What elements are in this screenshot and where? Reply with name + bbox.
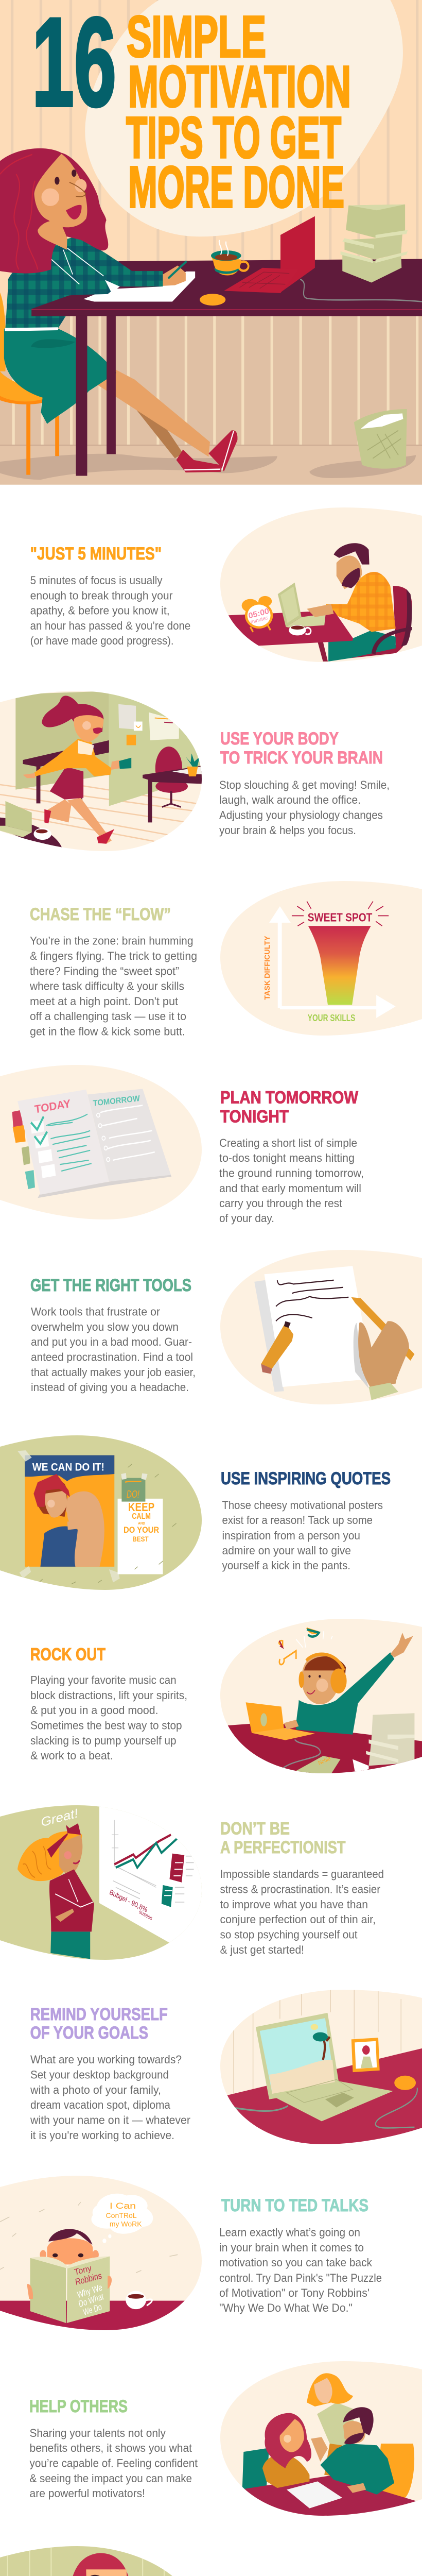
body text: to improve what you have than — [220, 1898, 368, 1911]
body text — [220, 1868, 384, 1956]
body text: yourself a kick in the pants. — [222, 1559, 350, 1572]
body text: apathy, & before you know it, — [30, 604, 170, 617]
body text: Creating a short list of simple — [219, 1137, 357, 1149]
heading: ROCK OUT — [30, 1645, 106, 1665]
body text: of your day. — [219, 1212, 274, 1225]
body text: off a challenging task — use it to — [30, 1010, 186, 1023]
body text: & put you in a good mood. — [30, 1704, 159, 1717]
chart: sweet spot funnel, task difficulty vs your skills — [220, 881, 422, 1036]
body text: Those cheesy motivational posters — [222, 1499, 383, 1512]
body text: exist for a reason! Tack up some — [222, 1514, 373, 1527]
illustration: laptop with beach wallpaper and family photo — [220, 1989, 422, 2150]
body text: with your name on it — whatever — [30, 2113, 190, 2127]
illustration: person reading Tony Robbins book: ConTRoL — [106, 2211, 137, 2219]
body text: get in the flow & kick some butt. — [30, 1025, 185, 1038]
panel: tip turn to ted talks — [0, 2176, 382, 2337]
body text: Adjusting your physiology changes — [219, 809, 383, 821]
panel: tip plan tomorrow tonight — [0, 1065, 364, 1225]
body text: benefits others, it shows you what — [30, 2442, 192, 2454]
body text — [219, 778, 390, 837]
body text: stress & procrastination. It’s easier — [220, 1883, 380, 1896]
body text: overwhelm you slow you down — [31, 1320, 179, 1333]
hero scene: office background and woman at desk — [0, 0, 422, 485]
heading: TURN TO TED TALKS — [221, 2196, 368, 2215]
illustration: person reading Tony Robbins book: Do What — [78, 2292, 105, 2310]
body text: conjure perfection out of thin air, — [220, 1913, 376, 1926]
body text — [219, 2226, 382, 2314]
illustration: man with headphones rocking out at laptop — [220, 1619, 422, 1775]
body text: and put you in a bad mood. Guar- — [31, 1335, 192, 1348]
illustration: open planner with today and tomorrow pages: TODAY — [34, 1097, 72, 1116]
body text: in your brain when it comes to — [219, 2241, 364, 2254]
body text: (or have made good progress). — [30, 634, 174, 647]
chart: sweet spot funnel, task difficulty vs your skills: TASK DIFFICULTY — [263, 936, 272, 1000]
title — [126, 4, 351, 219]
body text — [30, 2427, 198, 2500]
illustration: woman presenting chart on whiteboard: Bubgel - 90,8% — [109, 1888, 149, 1914]
heading — [220, 1088, 359, 1127]
body text — [30, 2053, 190, 2142]
body text: motivation so you can take back — [219, 2256, 373, 2269]
heading: REMIND YOURSELF — [30, 2005, 168, 2024]
illustration: person reading Tony Robbins book: Why We — [76, 2282, 103, 2300]
heading: TONIGHT — [220, 1107, 289, 1127]
chart: sweet spot funnel, task difficulty vs your skills: SWEET SPOT — [308, 911, 372, 924]
body text: an hour has passed & you’re done — [30, 619, 190, 632]
title: SIMPLE — [127, 4, 266, 69]
illustration: we can do it and keep calm posters — [0, 1435, 202, 1590]
illustration: we can do it and keep calm posters: BEST — [132, 1535, 149, 1543]
heading — [30, 2005, 168, 2043]
body text — [219, 1137, 364, 1225]
illustration: woman presenting chart on whiteboard: Great! — [40, 1806, 79, 1829]
illustration: hand writing with a broken pencil — [220, 1250, 422, 1404]
heading — [220, 729, 383, 768]
body text — [31, 1306, 196, 1394]
body text: laugh, walk around the office. — [219, 793, 361, 806]
illustration: dancing woman in office — [0, 691, 207, 851]
body text — [29, 935, 197, 1038]
body text: & fingers flying. The trick to getting — [30, 950, 197, 962]
body text: Impossible standards = guaranteed — [220, 1868, 384, 1880]
heading: DON’T BE — [220, 1819, 290, 1839]
illustration: person reading Tony Robbins book: I Can — [110, 2201, 136, 2211]
body text: are powerful motivators! — [30, 2487, 145, 2500]
heading: PLAN TOMORROW — [220, 1088, 359, 1108]
body text: and that early momentum will — [219, 1182, 361, 1195]
illustration: three coworkers talking at table — [220, 2361, 422, 2521]
body text: of Motivation" or Tony Robbins' — [219, 2286, 370, 2299]
body text: inspiration from a person you — [222, 1529, 360, 1542]
illustration: we can do it and keep calm posters: AND — [138, 1522, 145, 1526]
body text: enough to break through your — [30, 589, 173, 602]
panel: hero illustration — [0, 0, 422, 485]
illustration: person reading Tony Robbins book: Robbins — [75, 2270, 102, 2287]
body text: you’re capable of. Feeling confident — [30, 2456, 198, 2470]
body text: there? Finding the “sweet spot” — [30, 964, 179, 978]
illustration: person reading Tony Robbins book: Tony — [74, 2263, 93, 2277]
heading — [220, 1819, 346, 1857]
illustration: woman presenting chart on whiteboard: susess — [138, 1909, 153, 1922]
body text: so stop psyching yourself out — [220, 1928, 357, 1941]
panel: tip remind yourself of your goals — [30, 1989, 422, 2150]
body text: that actually makes your job easier, — [31, 1366, 196, 1379]
illustration: open planner with today and tomorrow pages — [0, 1065, 202, 1219]
panel: tip use inspiring quotes — [0, 1435, 391, 1590]
body text: dream vacation spot, diploma — [30, 2098, 171, 2111]
body text: meet at a high point. Don't put — [30, 995, 178, 1008]
illustration: woman eating ice cream — [0, 2546, 172, 2576]
panel: tip chase the flow — [29, 881, 422, 1038]
heading: OF YOUR GOALS — [30, 2023, 148, 2043]
body text: & work to a beat. — [30, 1749, 113, 1762]
illustration: we can do it and keep calm posters: KEEP — [128, 1501, 154, 1514]
body text: What are you working towards? — [30, 2053, 182, 2066]
illustration: bearded man at laptop with clock: minutes — [250, 615, 269, 625]
heading: CHASE THE “FLOW” — [30, 905, 171, 924]
body text: the ground running tomorrow, — [219, 1166, 364, 1180]
body text: & seeing the impact you can make — [30, 2472, 192, 2485]
body text: block distractions, lift your spirits, — [30, 1689, 187, 1702]
illustration: woman presenting chart on whiteboard — [0, 1805, 202, 1960]
panel: tip don't force it — [0, 2546, 172, 2576]
body text: 5 minutes of focus is usually — [30, 574, 163, 587]
illustration: bearded man at laptop with clock: 05:00 — [248, 607, 270, 621]
body text — [30, 1673, 187, 1762]
body text: Work tools that frustrate or — [31, 1306, 160, 1318]
body text: Sharing your talents not only — [30, 2427, 166, 2439]
body text: slacking is to pump yourself up — [30, 1734, 177, 1747]
illustration: person reading Tony Robbins book: my WoRK — [110, 2219, 142, 2228]
heading: TO TRICK YOUR BRAIN — [220, 748, 383, 768]
heading: A PERFECTIONIST — [220, 1838, 346, 1857]
body text: instead of giving you a headache. — [31, 1381, 189, 1394]
chart: sweet spot funnel, task difficulty vs your skills: YOUR SKILLS — [308, 1013, 355, 1024]
body text: Set your desktop background — [30, 2069, 169, 2081]
illustration: person reading Tony Robbins book: We Do — [82, 2302, 102, 2318]
illustration: we can do it and keep calm posters: WE CAN DO IT! — [32, 1461, 104, 1473]
panel: tip use your body to trick your brain — [0, 691, 390, 851]
body text: "Why We Do What We Do." — [219, 2301, 353, 2314]
body text: it is you're working to achieve. — [30, 2129, 174, 2142]
body text: your brain & helps you focus. — [219, 824, 356, 837]
body text: control. Try Dan Pink's "The Puzzle — [219, 2272, 382, 2284]
body text: to-dos tonight means hitting — [219, 1151, 355, 1164]
body text: Sometimes the best way to stop — [30, 1719, 182, 1732]
illustration: bearded man at laptop with clock — [220, 507, 422, 662]
panel: tip get the right tools — [30, 1250, 422, 1404]
body text: carry you through the rest — [219, 1197, 342, 1210]
body text: admire on your wall to give — [222, 1544, 351, 1557]
body text: where task difficulty & your skills — [29, 980, 184, 992]
body text — [222, 1499, 383, 1572]
body text — [30, 574, 190, 647]
heading: "JUST 5 MINUTES" — [30, 544, 162, 564]
heading: USE YOUR BODY — [220, 729, 339, 749]
heading: GET THE RIGHT TOOLS — [30, 1276, 191, 1295]
body text: anteed procrastination. Find a tool — [31, 1351, 193, 1363]
panel: tip help others — [29, 2361, 422, 2521]
illustration: we can do it and keep calm posters: DO! — [127, 1488, 139, 1500]
illustration: we can do it and keep calm posters: CALM — [132, 1512, 151, 1520]
panel: tip don't be a perfectionist — [0, 1799, 384, 1966]
body text: & just get started! — [220, 1943, 304, 1956]
illustration: man with headphones rocking out at laptop: Noble — [318, 1756, 331, 1767]
panel: tip rock out — [30, 1619, 422, 1775]
illustration: we can do it and keep calm posters: DO YOUR — [124, 1526, 159, 1535]
body text: You’re in the zone: brain humming — [30, 935, 194, 947]
panel: tip just 5 minutes — [30, 507, 422, 662]
body text: with a photo of your family, — [30, 2083, 161, 2096]
body text: Stop slouching & get moving! Smile, — [219, 778, 390, 791]
body text: Learn exactly what’s going on — [219, 2226, 360, 2239]
body text: Playing your favorite music can — [30, 1673, 177, 1687]
heading: HELP OTHERS — [29, 2397, 128, 2416]
illustration: person reading Tony Robbins book — [0, 2176, 202, 2337]
illustration: open planner with today and tomorrow pages: TOMORROW — [93, 1094, 140, 1108]
